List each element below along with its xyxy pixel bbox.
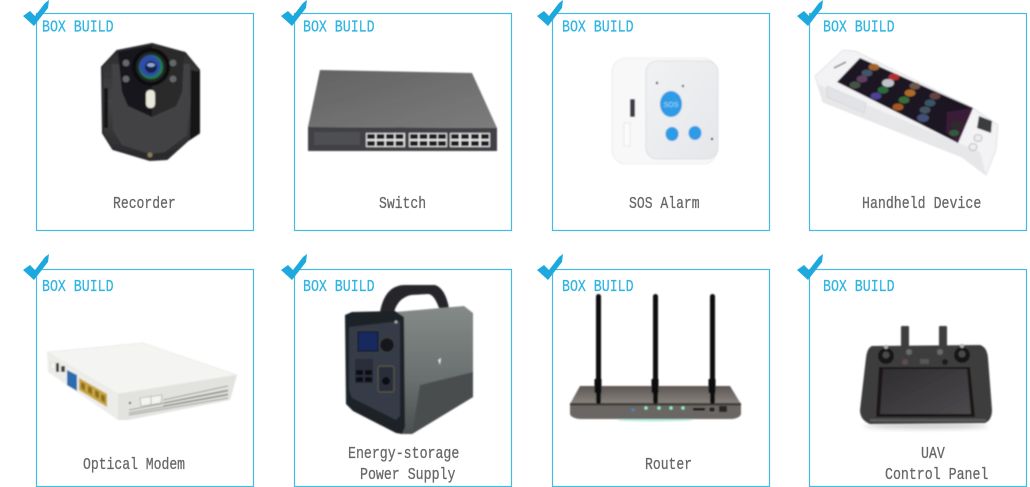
label: Power Supply bbox=[360, 465, 455, 485]
label: Switch bbox=[379, 193, 426, 214]
label: UAV bbox=[921, 444, 946, 464]
panel: SOS Alarm bbox=[537, 0, 770, 230]
icon: check mark bbox=[281, 254, 307, 280]
icon: check mark bbox=[797, 0, 823, 26]
panel: UAV Control Panel bbox=[797, 254, 1026, 486]
icon: SOS alarm device bbox=[612, 58, 718, 164]
icon: check mark bbox=[537, 254, 563, 280]
label: Recorder bbox=[113, 193, 176, 214]
panel: Handheld Device bbox=[797, 0, 1026, 230]
icon: check mark bbox=[797, 254, 823, 280]
badge text: BOX BUILD bbox=[562, 277, 634, 297]
panel: Energy-storage Power Supply bbox=[281, 254, 512, 486]
badge text: BOX BUILD bbox=[823, 17, 895, 37]
icon: SOS alarm device: SOS bbox=[664, 102, 679, 109]
label: Handheld Device bbox=[862, 194, 981, 214]
badge text: BOX BUILD bbox=[303, 17, 375, 37]
icon: UAV remote controller bbox=[860, 326, 992, 429]
label: Optical Modem bbox=[83, 454, 185, 475]
badge text: BOX BUILD bbox=[823, 277, 895, 297]
label: Control Panel bbox=[885, 465, 988, 485]
icon: body camera recorder bbox=[102, 44, 200, 160]
panel: Switch bbox=[281, 0, 512, 230]
panel: Recorder bbox=[23, 0, 254, 230]
icon: portable power station bbox=[345, 285, 473, 434]
icon: wireless router bbox=[570, 294, 741, 422]
icon: handheld POS device bbox=[815, 50, 998, 175]
badge text: BOX BUILD bbox=[562, 17, 634, 37]
icon: network switch bbox=[308, 70, 497, 151]
icon: check mark bbox=[23, 0, 49, 26]
badge text: BOX BUILD bbox=[42, 277, 114, 297]
label: Energy-storage bbox=[348, 444, 459, 464]
icon: check mark bbox=[281, 0, 307, 26]
badge text: BOX BUILD bbox=[303, 277, 375, 297]
icon: check mark bbox=[537, 0, 563, 26]
label: SOS Alarm bbox=[629, 193, 700, 214]
label: Router bbox=[645, 454, 692, 475]
panel: Router bbox=[537, 254, 770, 486]
panel: Optical Modem bbox=[23, 254, 254, 486]
badge text: BOX BUILD bbox=[42, 17, 114, 37]
icon: optical modem bbox=[47, 343, 237, 420]
icon: check mark bbox=[23, 254, 49, 280]
